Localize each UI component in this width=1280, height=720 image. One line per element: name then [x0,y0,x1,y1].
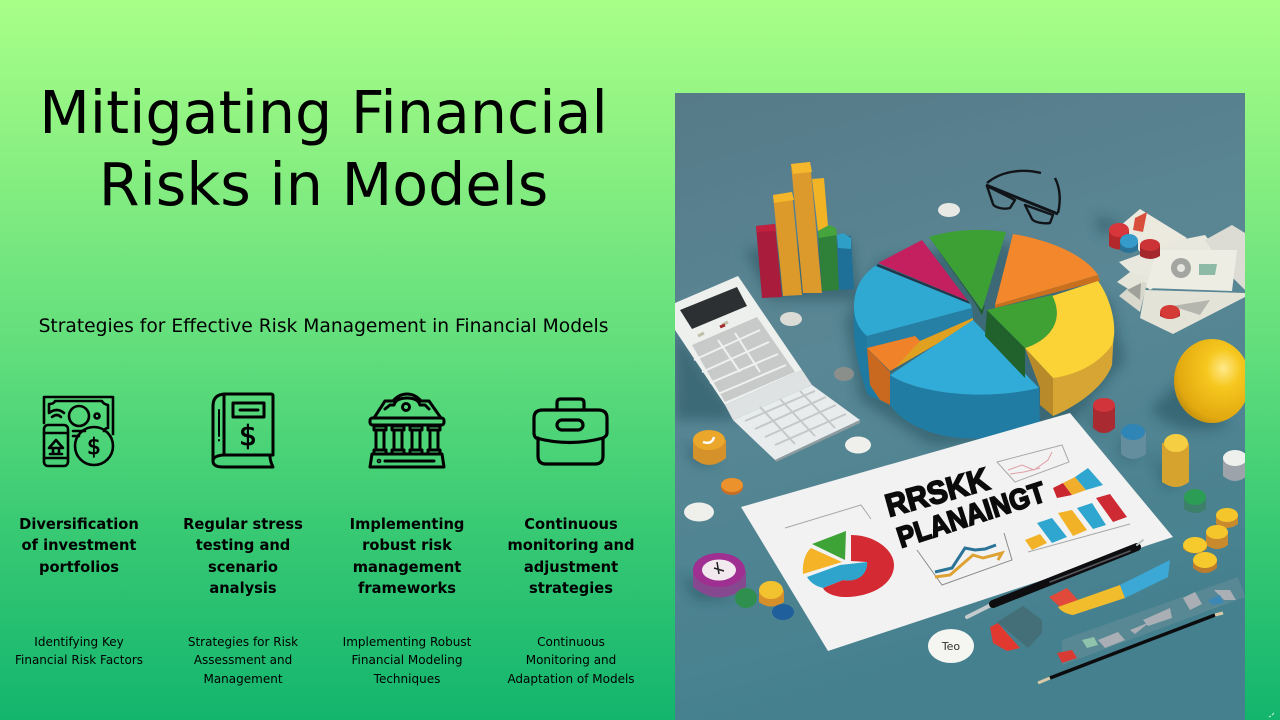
heading: stress testing: analysis [209,580,277,597]
glasses [986,171,1060,223]
heading: monitoring: adjustment [524,559,618,576]
text: assessment [188,635,298,686]
bar chart model [756,162,854,298]
thin axis on paper [785,505,871,528]
text: assessment: Management [203,672,283,686]
heading: risk frameworks: management [353,559,461,576]
framed sketch chart [997,445,1069,482]
text: risk factors: Identifying Key [34,635,124,649]
watermark specks [1269,713,1274,717]
icon: finance book [213,394,273,467]
text: assessment: Strategies for Risk [188,635,298,649]
heading: stress testing: testing and [196,537,290,554]
photo: financial risk planning desk [675,93,1250,720]
yellow sphere [1174,339,1250,423]
heading: risk frameworks: Implementing [350,516,464,533]
heading: diversification: portfolios [39,559,119,576]
text: adaptation: Continuous [537,635,605,649]
text: adaptation: Monitoring and [526,653,616,667]
icon: finance book: $ [239,419,257,452]
heading: monitoring [508,516,634,597]
text: modeling techniques: Financial Modeling [352,653,462,667]
right chip stacks [1093,398,1247,513]
text: modeling techniques [343,635,472,686]
white token with label [928,629,974,663]
small bar chart on paper [1025,494,1130,552]
title [39,79,608,219]
mock report title: PLANAINGT [893,477,1050,555]
heading: monitoring: monitoring and [508,537,634,554]
text: adaptation: Adaptation of Models [507,672,635,686]
report paper [741,413,1173,651]
text: risk factors [15,635,143,667]
heading: risk frameworks: robust risk [362,537,452,554]
heading: stress testing: Regular stress [183,516,303,533]
floor chart shapes [990,560,1245,665]
icon: digital money [44,397,113,466]
icon: bank building [370,394,444,467]
heading: stress testing: scenario [208,559,278,576]
heading: diversification [19,516,139,576]
calculator [675,276,860,462]
text: modeling techniques: Implementing Robust [343,635,471,649]
gold coins [1183,508,1238,573]
line chart [917,533,1012,585]
heading: monitoring: Continuous [524,516,618,533]
poker chips on cash [1109,223,1180,319]
cash pile [1117,209,1245,334]
heading: risk frameworks [350,516,464,597]
title: Risks in Models [99,151,548,219]
3D pie chart [854,230,1114,439]
stacked bar on paper [1053,468,1103,498]
text: modeling techniques: Techniques [374,672,440,686]
pen [967,540,1143,617]
heading: risk frameworks: frameworks [358,580,456,597]
icon: digital money: $ [87,435,101,460]
heading: diversification: of investment [22,537,136,554]
left chips and tokens [684,203,960,620]
heading: stress testing [183,516,303,597]
text: risk factors: Financial Risk Factors [15,653,143,667]
mock report title: RRSKK [881,461,993,524]
title: Mitigating Financial [39,79,608,147]
heading: diversification: Diversification [19,516,139,533]
heading: monitoring: strategies [529,580,613,597]
white token with label: Teo [941,640,960,653]
icon: briefcase [534,399,607,464]
subtitle: Strategies for Effective Risk Management in Financial Models [39,316,608,337]
mini pie chart [803,531,894,597]
shadows on desk [675,215,1230,600]
text: assessment: Assessment and [194,653,292,667]
pencil [1038,613,1223,683]
text: adaptation [507,635,635,686]
